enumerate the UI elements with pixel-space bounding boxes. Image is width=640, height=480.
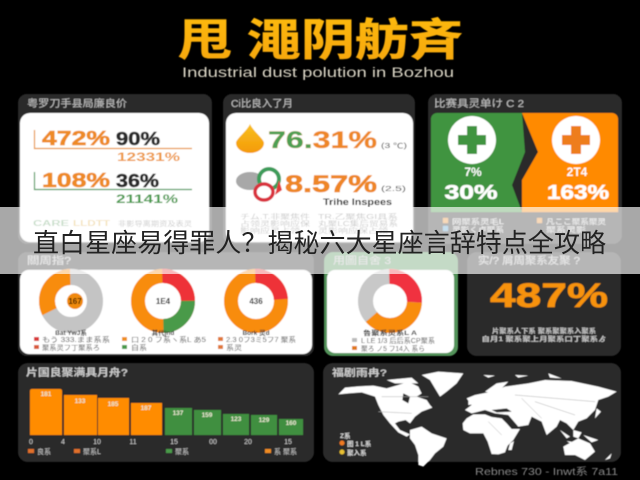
bar values: 185 bbox=[108, 401, 119, 408]
panel heading: world map: 福剧雨冉? bbox=[332, 367, 387, 379]
x axis labels: 15 bbox=[284, 439, 292, 446]
panel heading: big number: 实/? 屑周聚系友聚 ? bbox=[478, 254, 580, 267]
notes: TR.乙聚焦GI具系 bbox=[318, 212, 398, 221]
notes: 丸聚LC集后贸易系 bbox=[318, 219, 398, 228]
donut labels and legends: 口 2 0 フ系ヽ系L あ5 bbox=[131, 335, 206, 344]
stat: 76.31%: (3 ℃) bbox=[381, 142, 407, 150]
footnote: 非影导离期资及表灵 bbox=[118, 219, 192, 228]
big number: 487% bbox=[490, 277, 608, 315]
bar values: 181 bbox=[41, 391, 52, 398]
bar values: 187 bbox=[141, 405, 152, 412]
orange half: 2T4 bbox=[567, 165, 588, 179]
legend: Z系 bbox=[340, 431, 351, 440]
description: 自月1 聚系聚上月聚系口丁聚系ゟ bbox=[482, 334, 606, 343]
bar values: 123 bbox=[231, 416, 242, 423]
donut labels and legends: Bat YwJ系 bbox=[55, 328, 87, 337]
panel: donut charts bbox=[18, 252, 314, 356]
donut labels and legends: Bork 灵d bbox=[242, 329, 270, 337]
caption: Trihe Inspees bbox=[323, 197, 392, 207]
stat group: orange bbox=[34, 128, 192, 164]
legend bbox=[340, 431, 372, 457]
x axis labels bbox=[29, 439, 292, 446]
x axis labels: 0 bbox=[29, 439, 33, 446]
notes bbox=[240, 212, 398, 235]
stat group: orange: 12331% bbox=[117, 152, 180, 164]
title: 甩 澠阴舫斉 bbox=[178, 16, 463, 65]
x axis labels: 10 bbox=[93, 439, 101, 446]
panel heading: emission rates: 粤罗刀手县局廉良价 bbox=[27, 97, 127, 110]
bar values: 129 bbox=[259, 417, 270, 424]
donut: fourth bbox=[366, 276, 414, 326]
legend: 聚系 bbox=[175, 447, 189, 456]
stat group: green: 36% bbox=[116, 171, 159, 191]
description bbox=[482, 326, 606, 343]
donut labels and legends bbox=[34, 328, 296, 352]
icon: drop bbox=[236, 124, 264, 153]
legend: 灵影く卢聚系 bbox=[452, 225, 504, 234]
banner headline: 直白星座易得罪人？揭秘六大星座言辞特点全攻略 bbox=[33, 228, 606, 258]
panel heading: donut charts: 關周指? bbox=[27, 254, 72, 267]
donut: first bbox=[47, 277, 95, 325]
footnote: CARE bbox=[33, 219, 70, 228]
bars: orange bbox=[30, 389, 162, 435]
x axis labels: 20 bbox=[244, 439, 252, 446]
panel heading: single donut: 用圖自舍 3 bbox=[333, 254, 392, 267]
icon: orange plus bbox=[552, 116, 600, 164]
panel: percentages bbox=[223, 94, 415, 244]
map bbox=[338, 372, 617, 467]
legend: 聚系灵影 bbox=[546, 225, 586, 234]
stat: 8.57% bbox=[285, 171, 406, 198]
stat group: green: 21141% bbox=[116, 192, 178, 206]
donut labels and legends: 系灵 bbox=[226, 343, 242, 352]
donut: second bbox=[138, 276, 188, 326]
legend: 网聚系灵毛L bbox=[452, 217, 504, 226]
legend bbox=[28, 447, 297, 456]
stat group: orange: 90% bbox=[116, 129, 160, 149]
green half bbox=[431, 113, 525, 212]
donut labels and legends: もう 333.まま系系 bbox=[42, 335, 110, 344]
bar values bbox=[41, 391, 297, 427]
donut labels and legends: 聚系灵フ丁聚系ろ bbox=[42, 343, 100, 352]
stat group: green: 108% bbox=[42, 170, 110, 192]
legend: L LE 1/3 后后系CP聚系 bbox=[361, 336, 435, 345]
green half: 7% bbox=[464, 165, 482, 179]
donut labels and legends: 2.3 0フ3ミ5フ7 聚系 bbox=[226, 335, 296, 344]
bar values: 133 bbox=[75, 398, 86, 405]
legend: 图 1 L系 bbox=[347, 439, 372, 448]
description: 片聚系人下系 聚系聚聚系入聚系 bbox=[492, 326, 597, 335]
donut: first: 167 bbox=[68, 297, 82, 306]
x axis labels: 11 bbox=[129, 439, 137, 446]
source caption: Rebnes 730 - Inwt系 7a11 bbox=[475, 466, 619, 478]
stat: 8.57%: (2.5) bbox=[381, 186, 406, 193]
panel: world map bbox=[323, 363, 621, 467]
panel heading: percentages: Ci比良入了月 bbox=[231, 97, 293, 110]
donut: third bbox=[231, 276, 281, 326]
x axis labels: 4 bbox=[61, 439, 65, 446]
panel: big number bbox=[467, 252, 621, 356]
bars: green bbox=[165, 408, 303, 435]
panel: emission rates bbox=[18, 94, 212, 244]
panel: single donut bbox=[324, 252, 458, 356]
notes: 占领灵影响应保 bbox=[240, 219, 310, 228]
panel: bar chart bbox=[18, 363, 314, 462]
donut: third: 436 bbox=[249, 297, 263, 306]
stat group: orange: 472% bbox=[42, 128, 110, 150]
donut labels and legends: 自系 bbox=[131, 343, 147, 352]
green half: 30% bbox=[444, 182, 498, 204]
icon: green plus bbox=[448, 116, 496, 164]
icon: rings bbox=[236, 169, 282, 200]
x axis labels: 15 bbox=[170, 439, 178, 446]
legend bbox=[352, 328, 435, 353]
orange half: 163% bbox=[547, 182, 609, 204]
legend: 系 聚系 bbox=[274, 447, 297, 456]
notes: 影响应灵占领 bbox=[240, 226, 300, 235]
footnote bbox=[33, 219, 192, 228]
panel: comparison bbox=[428, 94, 622, 244]
donut: second: 1E4 bbox=[156, 297, 171, 306]
orange half bbox=[522, 113, 618, 212]
legend bbox=[443, 217, 606, 234]
donut labels and legends: 其代jnd bbox=[152, 328, 174, 337]
bar values: 159 bbox=[202, 412, 213, 419]
legend: 聚系L bbox=[83, 447, 101, 456]
x axis labels: 00 bbox=[209, 439, 217, 446]
legend: 鲁聚系灵系L A bbox=[363, 328, 417, 337]
bar values: 160 bbox=[286, 420, 297, 427]
overlay banner bbox=[0, 207, 640, 274]
stat: 76.31%: 76. 31% bbox=[268, 127, 377, 154]
stat: 8.57%: 8.57% bbox=[285, 171, 377, 198]
bar values: 137 bbox=[173, 410, 184, 417]
notes: チム.T.非聚焦件 bbox=[240, 212, 310, 221]
legend: 凡ここ聚系聚灵 bbox=[546, 217, 606, 226]
stat: 76.31% bbox=[268, 127, 407, 154]
footnote: LLDTT bbox=[73, 219, 110, 228]
stat group: green bbox=[34, 170, 192, 206]
subtitle: Industrial dust polution in Bozhou bbox=[182, 64, 454, 80]
legend: 聚ろ ノ5 フ14入 系ら bbox=[361, 344, 425, 353]
notes: 灵影响应保占领 bbox=[318, 226, 388, 235]
legend: 聚入系 bbox=[347, 448, 367, 457]
panel heading: comparison: 比赛具灵单け C 2 bbox=[434, 97, 524, 110]
panel heading: bar chart: 片国良聚满具月舟? bbox=[26, 366, 128, 379]
legend: 良系 bbox=[37, 447, 51, 456]
